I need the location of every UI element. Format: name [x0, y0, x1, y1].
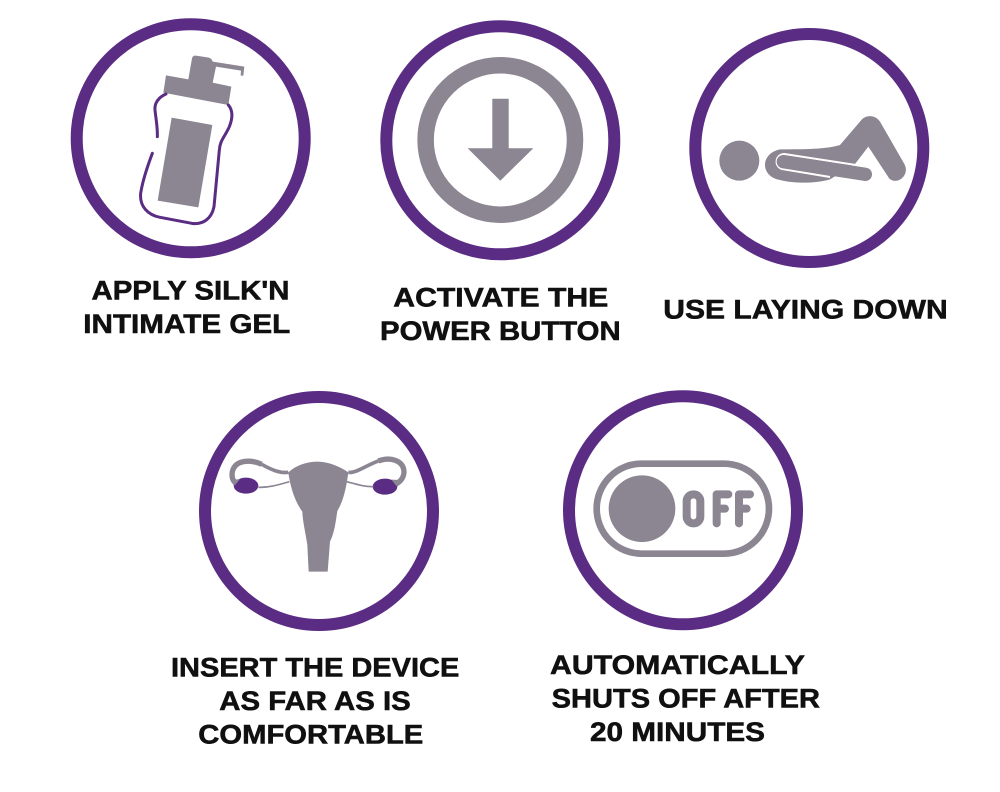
icon: uterus: [232, 459, 404, 572]
label: step 4: [171, 653, 459, 749]
label: step 5: [550, 650, 820, 747]
icon: gel pump bottle: [141, 56, 244, 224]
label: step 3: USE LAYING DOWN: [663, 294, 948, 324]
ring: step 3: [695, 34, 923, 262]
label: step 1: [83, 275, 290, 339]
label: step 1: APPLY SILK'N: [92, 275, 290, 305]
icon: power button with down arrow: [426, 65, 575, 215]
label: step 5: AUTOMATICALLY: [550, 650, 805, 680]
label: step 2: POWER BUTTON: [380, 316, 621, 346]
icon: off toggle switch: [597, 464, 769, 554]
ring: step 5: [569, 396, 797, 624]
label: step 2: [380, 283, 621, 346]
step 1: apply gel: [77, 24, 305, 339]
label: step 5: SHUTS OFF AFTER: [552, 683, 820, 713]
label: step 1: INTIMATE GEL: [83, 309, 290, 339]
label: step 2: ACTIVATE THE: [393, 283, 608, 313]
step 5: auto shut off: [550, 396, 820, 747]
step 3: laying down: [663, 34, 948, 324]
step 4: insert device: [171, 397, 459, 749]
ring: step 4: [205, 397, 433, 625]
ring: step 1: [77, 24, 305, 252]
step 2: power button: [380, 26, 621, 346]
ring: step 2: [386, 26, 614, 254]
label: step 4: INSERT THE DEVICE: [171, 653, 459, 683]
label: step 4: COMFORTABLE: [198, 719, 423, 749]
icon: person laying down: [719, 116, 906, 183]
label: step 5: 20 MINUTES: [590, 717, 765, 747]
label: step 4: AS FAR AS IS: [219, 686, 411, 716]
